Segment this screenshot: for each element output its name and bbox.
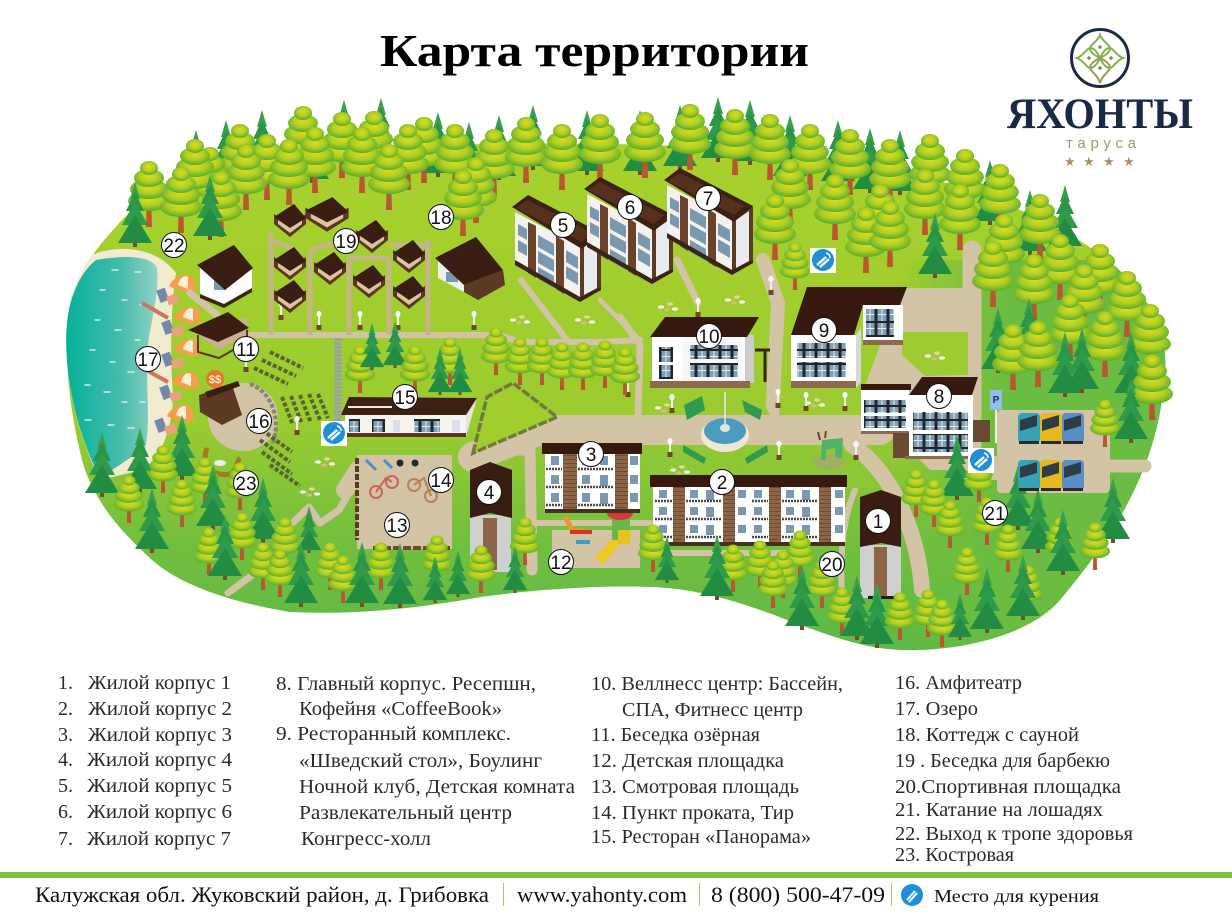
legend column 1: 7. <box>58 828 73 850</box>
marker 11 <box>234 336 258 362</box>
marker 5: 5 <box>558 216 568 237</box>
lake <box>66 257 157 478</box>
legend column 2: Развлекательный центр <box>299 802 512 824</box>
marker 5 <box>550 212 576 238</box>
logo: Яхонты Таруса: ЯХОНТЫ <box>1007 91 1193 138</box>
marker 13: 13 <box>386 516 408 537</box>
marker 15: 15 <box>394 388 416 409</box>
building 4 <box>470 462 512 572</box>
marker 16: 16 <box>248 412 270 433</box>
legend column 3: 11. Беседка озёрная <box>591 724 760 746</box>
rental bikes and segways <box>366 460 437 502</box>
cars on parking <box>1018 413 1084 491</box>
legend column 4: 16. Амфитеатр <box>895 672 1022 694</box>
marker 8: 8 <box>934 387 944 408</box>
beach <box>66 249 176 480</box>
footer contacts <box>35 882 1099 907</box>
marker 22: 22 <box>163 236 185 257</box>
marker 9: 9 <box>819 321 829 342</box>
logo: Яхонты Таруса: ★★★★ <box>1064 155 1135 170</box>
umbrellas and loungers <box>142 275 201 435</box>
lake ripples <box>85 270 146 445</box>
legend column 1: 6. <box>58 801 73 823</box>
marker 4 <box>476 480 502 504</box>
icon: smoking area <box>901 884 923 906</box>
legend column 4: 23. Костровая <box>895 844 1014 866</box>
legend column 3 <box>591 673 843 848</box>
deer statue <box>813 431 845 470</box>
legend column 1: Жилой корпус 3 <box>88 724 232 746</box>
legend column 2: Конгресс-холл <box>301 828 431 850</box>
logo: Яхонты Таруса: таруса <box>1066 135 1137 152</box>
legend column 1: Жилой корпус 7 <box>87 828 231 850</box>
footer contacts: 8 (800) 500-47-09 <box>711 882 885 907</box>
building 3 <box>542 443 642 513</box>
forest: back row of pines <box>179 97 1082 255</box>
forest: right cluster <box>972 214 1173 447</box>
paths and roads <box>190 250 1145 595</box>
building 15: restaurant Panorama <box>341 397 477 437</box>
building 11: lake gazebo <box>188 312 249 358</box>
cottage near path 22 <box>197 245 253 308</box>
footer contacts: Место для курения <box>934 886 1099 906</box>
marker 6: 6 <box>625 198 635 219</box>
logo: Яхонты Таруса <box>1007 30 1193 170</box>
marker 7 <box>696 186 720 210</box>
legend column 1: Жилой корпус 4 <box>87 749 232 771</box>
legend column 1 <box>58 672 232 850</box>
legend column 2: Ночной клуб, Детская комната <box>299 776 575 798</box>
campfire area <box>205 448 240 475</box>
island ground <box>67 143 1165 650</box>
lawn patch with flowers <box>902 332 968 376</box>
amphitheatre: $$ <box>209 374 221 386</box>
fenced triangular lawn <box>473 383 557 453</box>
legend column 3: 10. Веллнесс центр: Бассейн, <box>591 673 843 695</box>
legend column 4: 22. Выход к тропе здоровья <box>895 823 1133 845</box>
number markers <box>136 186 1008 576</box>
residential blocks 5, 6, 7 <box>512 168 753 302</box>
marker 6 <box>618 194 642 220</box>
legend column 1: 1. <box>58 672 73 694</box>
legend column 1: Жилой корпус 5 <box>87 775 232 797</box>
marker 8 <box>926 384 952 408</box>
legend column 1: 4. <box>58 749 73 771</box>
legend column 4: 20.Спортивная площадка <box>895 776 1121 798</box>
legend column 4: 19 . Беседка для барбекю <box>895 750 1110 772</box>
legend column 2: «Шведский стол», Боулинг <box>299 750 542 772</box>
marker 14: 14 <box>430 471 452 492</box>
marker 10: 10 <box>698 327 720 348</box>
marker 19: 19 <box>335 232 357 253</box>
marker 12: 12 <box>550 553 572 574</box>
parking sign <box>990 390 1002 443</box>
lawns around fountain <box>300 295 880 497</box>
marker 23: 23 <box>235 474 257 495</box>
fountain <box>701 392 749 452</box>
legend column 3: 15. Ресторан «Панорама» <box>591 826 811 848</box>
legend column 3: 14. Пункт проката, Тир <box>591 802 794 824</box>
parking lot <box>997 410 1110 493</box>
marker 20: 20 <box>821 555 843 576</box>
legend column 3: 12. Детская площадка <box>591 750 784 772</box>
darker grass, forest zone right <box>916 260 1166 650</box>
legend column 3: 13. Смотровая площадь <box>591 776 799 798</box>
gazebos: barbecue houses <box>274 197 425 313</box>
legend column 2 <box>276 673 575 850</box>
central grove <box>345 321 640 395</box>
legend column 4: 21. Катание на лошадях <box>895 799 1103 821</box>
building 8: main building <box>861 377 990 459</box>
legend column 1: 3. <box>58 724 73 746</box>
marker 11: 11 <box>236 340 256 361</box>
forest: foreground lower left <box>85 415 540 608</box>
legend column 4: 17. Озеро <box>895 698 978 720</box>
playground <box>552 505 640 568</box>
legend column 1: Жилой корпус 1 <box>88 672 231 694</box>
marker 1: 1 <box>873 512 883 533</box>
building 18: cottage with sauna <box>435 237 505 300</box>
forest: foreground lower centre and right <box>638 435 1130 648</box>
footer contacts: Калужская обл. Жуковский район, д. Грибовка <box>35 882 489 907</box>
building 9 <box>791 287 907 388</box>
benches <box>683 396 768 464</box>
legend column 1: 5. <box>58 775 73 797</box>
marker 18: 18 <box>430 208 452 229</box>
marker 1 <box>866 508 890 534</box>
gazebo walkways <box>271 232 428 335</box>
forest: upper deciduous trees <box>118 104 1061 290</box>
smoking area signs <box>321 248 994 473</box>
marker 2 <box>710 470 734 494</box>
legend column 4: 18. Коттедж с сауной <box>895 724 1079 746</box>
legend column 2: Кофейня «CoffeeBook» <box>299 698 502 720</box>
boardwalk <box>334 338 342 445</box>
marker 4: 4 <box>484 483 495 504</box>
footer contacts: www.yahonty.com <box>517 882 687 907</box>
viewing square <box>357 455 452 549</box>
paved area near main building <box>860 288 982 470</box>
legend column 2: 9. Ресторанный комплекс. <box>276 723 511 745</box>
legend column 3: СПА, Фитнесс центр <box>622 699 803 721</box>
map: resort territory <box>66 97 1180 660</box>
building 1 <box>860 490 901 599</box>
marker 2: 2 <box>717 473 727 494</box>
amphitheatre <box>199 352 328 486</box>
building 10 <box>650 317 770 388</box>
parking sign: P <box>993 395 1000 406</box>
title: Карта территории <box>380 25 809 76</box>
marker 21: 21 <box>984 504 1006 525</box>
legend column 2: 8. Главный корпус. Ресепшн, <box>276 673 536 695</box>
marker 3 <box>578 442 604 466</box>
marker 7: 7 <box>703 189 713 210</box>
legend column 4 <box>895 672 1133 866</box>
marker 3: 3 <box>586 445 596 466</box>
building 2 <box>650 475 847 546</box>
marker 17: 17 <box>137 350 159 371</box>
marker 9 <box>812 318 836 342</box>
legend column 1: Жилой корпус 2 <box>88 698 232 720</box>
lamps <box>244 276 858 460</box>
footer bar <box>0 872 1232 878</box>
legend column 1: 2. <box>58 698 73 720</box>
legend column 1: Жилой корпус 6 <box>87 801 232 823</box>
